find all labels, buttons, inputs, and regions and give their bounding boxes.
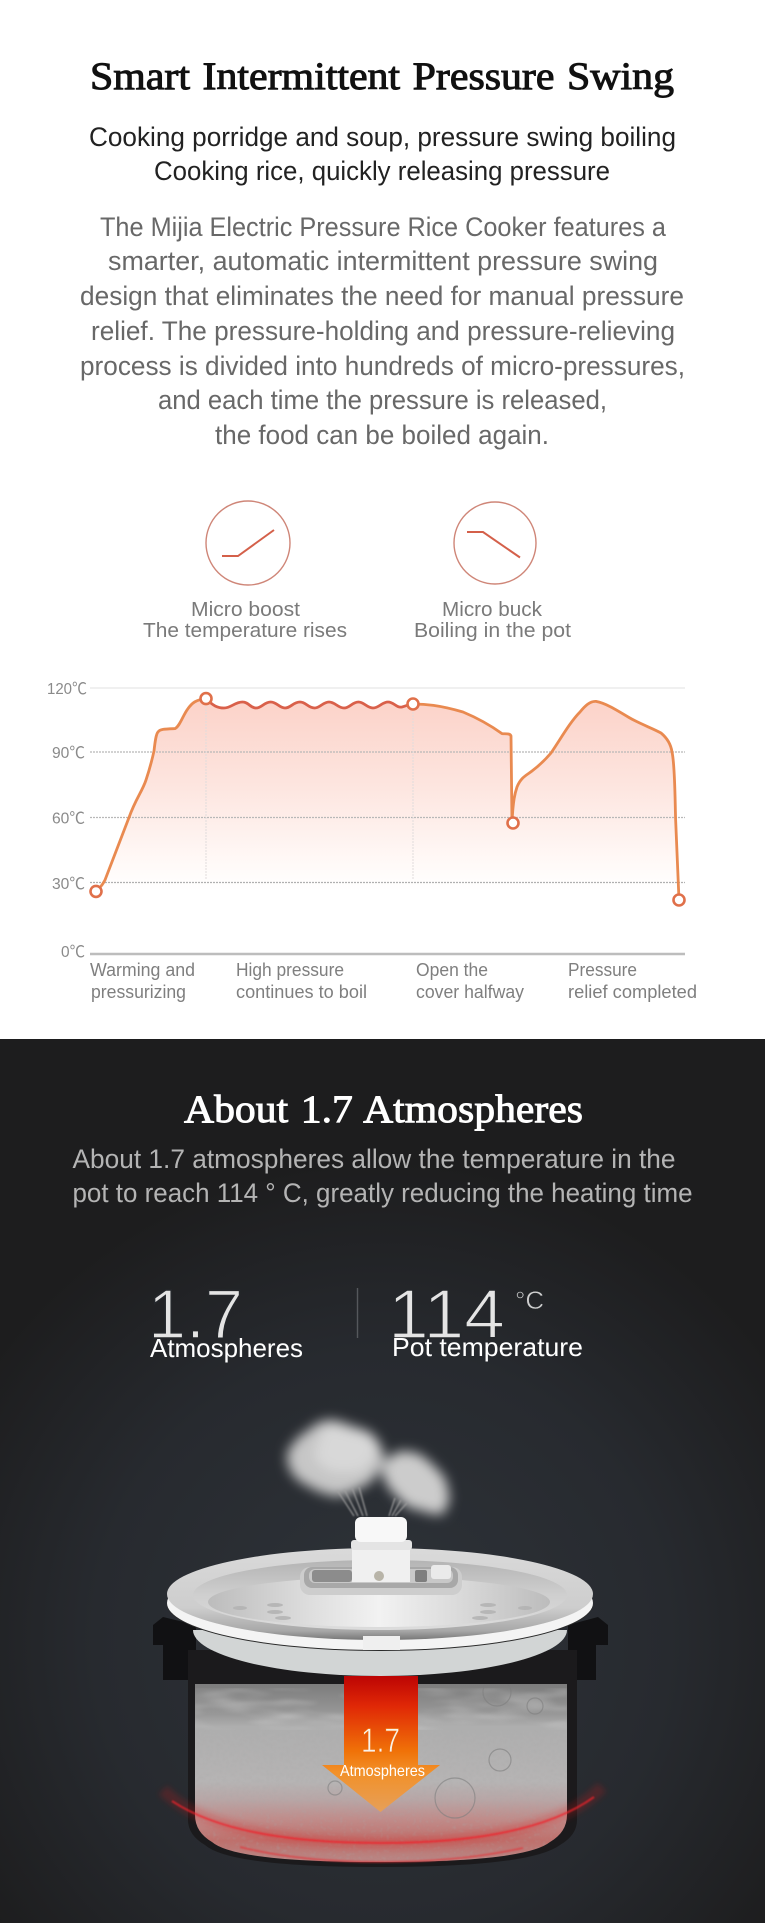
plate vents bbox=[233, 1603, 532, 1620]
latch bbox=[363, 1636, 400, 1650]
dark section description bbox=[72, 1144, 692, 1208]
label: micro buck bbox=[414, 599, 571, 642]
y axis labels: 30℃ bbox=[52, 876, 85, 893]
label: micro buck: Micro buck bbox=[442, 599, 543, 621]
x axis label: warming bbox=[90, 959, 195, 1002]
stat: 114 degrees pot temperature: Pot temperature bbox=[392, 1332, 583, 1362]
x axis label: high pressure: continues to boil bbox=[236, 981, 367, 1002]
y axis labels: 0℃ bbox=[61, 944, 85, 961]
x axis label: high pressure bbox=[236, 959, 367, 1002]
arrow: 1.7 atmospheres pressure: Atmospheres bbox=[340, 1763, 425, 1780]
heat glow bbox=[163, 1787, 602, 1862]
water bbox=[195, 1678, 567, 1864]
y axis labels: 60℃ bbox=[52, 810, 85, 828]
stat: 114 degrees pot temperature: °C bbox=[515, 1287, 544, 1315]
stat: 1.7 atmospheres: 1.7 bbox=[148, 1275, 243, 1353]
grid lines bbox=[90, 688, 685, 954]
subtitle text block bbox=[89, 122, 676, 186]
temperature curve bbox=[96, 699, 206, 891]
lid bbox=[167, 1548, 593, 1651]
x axis label: relief: relief completed bbox=[568, 981, 697, 1002]
panel: dark section background bbox=[0, 1039, 765, 1923]
stat: 1.7 atmospheres bbox=[148, 1275, 303, 1363]
icon: micro buck bbox=[454, 502, 536, 584]
heading: about 1.7 atmospheres: About 1.7 Atmospheres bbox=[184, 1088, 583, 1131]
description text block: and each time the pressure is released, bbox=[158, 385, 607, 415]
divider bbox=[356, 1288, 358, 1338]
icon: steam clouds bbox=[288, 1422, 460, 1525]
illustration: pressure cooker bbox=[153, 1517, 608, 1867]
x axis label: warming: pressurizing bbox=[91, 981, 186, 1002]
description text block: the food can be boiled again. bbox=[215, 420, 549, 450]
arrow: 1.7 atmospheres pressure: 1.7 bbox=[361, 1722, 400, 1760]
description text block: process is divided into hundreds of micro-pressures, bbox=[80, 351, 685, 381]
dark section description: pot to reach 114 ° C, greatly reducing the heating time bbox=[72, 1178, 692, 1208]
pressure wiggle bbox=[206, 699, 413, 708]
subtitle text block: Cooking rice, quickly releasing pressure bbox=[154, 156, 610, 186]
description text block: The Mijia Electric Pressure Rice Cooker features a bbox=[100, 212, 666, 242]
lid underside band bbox=[193, 1630, 567, 1676]
x axis label: high pressure: High pressure bbox=[236, 959, 344, 980]
stat: 114 degrees pot temperature bbox=[388, 1275, 583, 1362]
description text block: relief. The pressure-holding and pressure-relieving bbox=[91, 316, 675, 346]
x axis label: open cover: Open the bbox=[416, 959, 488, 980]
x axis label: relief bbox=[568, 959, 697, 1002]
label: micro buck: Boiling in the pot bbox=[414, 620, 571, 642]
label: micro boost: Micro boost bbox=[191, 599, 300, 621]
label: micro boost bbox=[143, 599, 347, 642]
y axis labels bbox=[47, 681, 87, 961]
stat: 114 degrees pot temperature: 114 bbox=[388, 1275, 505, 1353]
arrow: 1.7 atmospheres pressure bbox=[322, 1676, 440, 1812]
x axis label: open cover bbox=[416, 959, 525, 1002]
x axis label: warming: Warming and bbox=[90, 959, 195, 980]
description text block: design that eliminates the need for manual pressure bbox=[80, 281, 684, 311]
chart area fill bbox=[96, 699, 677, 891]
x axis label: relief: Pressure bbox=[568, 959, 637, 980]
stat: 1.7 atmospheres: Atmospheres bbox=[150, 1333, 303, 1363]
description text block bbox=[80, 212, 685, 450]
valve panel bbox=[300, 1565, 462, 1595]
dark section description: About 1.7 atmospheres allow the temperature in the bbox=[72, 1144, 676, 1174]
handles bbox=[153, 1617, 608, 1680]
markers bbox=[90, 693, 684, 906]
curve after opening bbox=[413, 701, 679, 900]
label: micro boost: The temperature rises bbox=[143, 620, 347, 642]
pressure valve knob bbox=[351, 1517, 412, 1582]
y axis labels: 120℃ bbox=[47, 681, 87, 698]
icon: micro boost bbox=[206, 501, 290, 585]
subtitle text block: Cooking porridge and soup, pressure swing boiling bbox=[89, 122, 676, 152]
x axis label: open cover: cover halfway bbox=[416, 981, 525, 1002]
description text block: smarter, automatic intermittent pressure swing bbox=[108, 246, 658, 276]
title: Smart Intermittent Pressure Swing bbox=[90, 55, 674, 98]
temperature line chart bbox=[47, 681, 685, 961]
y axis labels: 90℃ bbox=[52, 745, 85, 762]
pot body bbox=[188, 1650, 577, 1867]
